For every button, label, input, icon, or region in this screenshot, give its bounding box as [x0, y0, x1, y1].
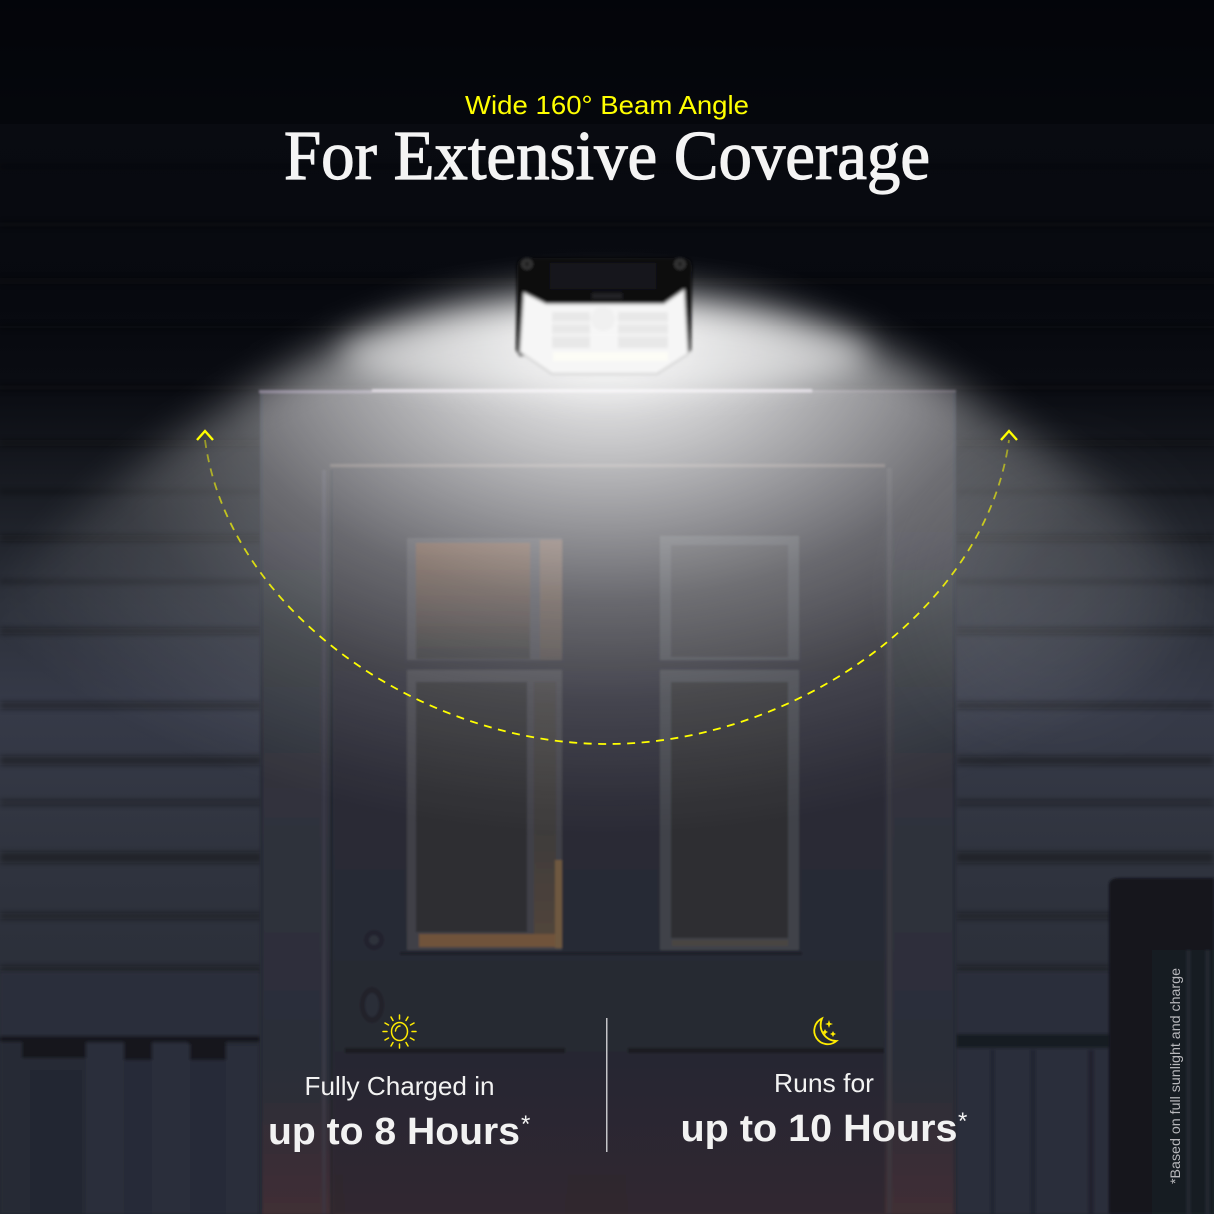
header band — [0, 0, 1214, 124]
text: runs for: * — [958, 1108, 967, 1135]
brand mark — [592, 293, 622, 299]
text: fully charged: up to 8 Hours — [268, 1111, 520, 1153]
led rows — [552, 312, 668, 348]
door lock — [360, 987, 384, 1023]
top trim left — [259, 390, 372, 393]
window left bottom — [407, 670, 562, 950]
light glow on wall — [38, 266, 1173, 789]
right wall light spill — [920, 460, 1180, 720]
bright beam core — [340, 310, 870, 394]
text: fully charged: * — [521, 1111, 530, 1138]
title: For Extensive Coverage — [284, 118, 930, 195]
solar panel — [550, 263, 656, 289]
icon: moon and stars — [814, 1018, 836, 1044]
top trim center — [372, 389, 812, 392]
window right top — [660, 536, 799, 660]
window left top — [407, 538, 562, 660]
light front — [520, 290, 688, 374]
divider — [606, 1018, 608, 1152]
text: fully charged — [268, 1071, 530, 1153]
text: runs for: up to 10 Hours — [680, 1108, 958, 1150]
door knob — [364, 930, 384, 950]
motion sensor — [591, 307, 615, 331]
fence rail left — [0, 972, 260, 1214]
text: fully charged: Fully Charged in — [304, 1071, 494, 1101]
text: runs for — [680, 1068, 967, 1150]
window right bottom — [660, 670, 799, 950]
arrowhead left — [197, 431, 213, 440]
arrowhead right — [1001, 431, 1017, 440]
top trim right — [812, 390, 956, 392]
beam angle arc — [197, 431, 1017, 744]
icon: sun — [383, 1015, 416, 1048]
subtitle: Wide 160° Beam Angle — [465, 90, 749, 120]
warm tint at door base — [262, 1060, 956, 1214]
text: runs for: Runs for — [774, 1068, 874, 1098]
fence rail right — [956, 972, 1110, 1214]
mounting screws — [522, 260, 532, 268]
door frame — [259, 389, 956, 1214]
footnote: *Based on full sunlight and charge — [1167, 968, 1183, 1184]
door with window panes — [330, 464, 885, 1214]
door lower rail and panels — [400, 952, 802, 955]
solar light fixture — [516, 258, 692, 374]
dark post right — [1109, 878, 1214, 1214]
